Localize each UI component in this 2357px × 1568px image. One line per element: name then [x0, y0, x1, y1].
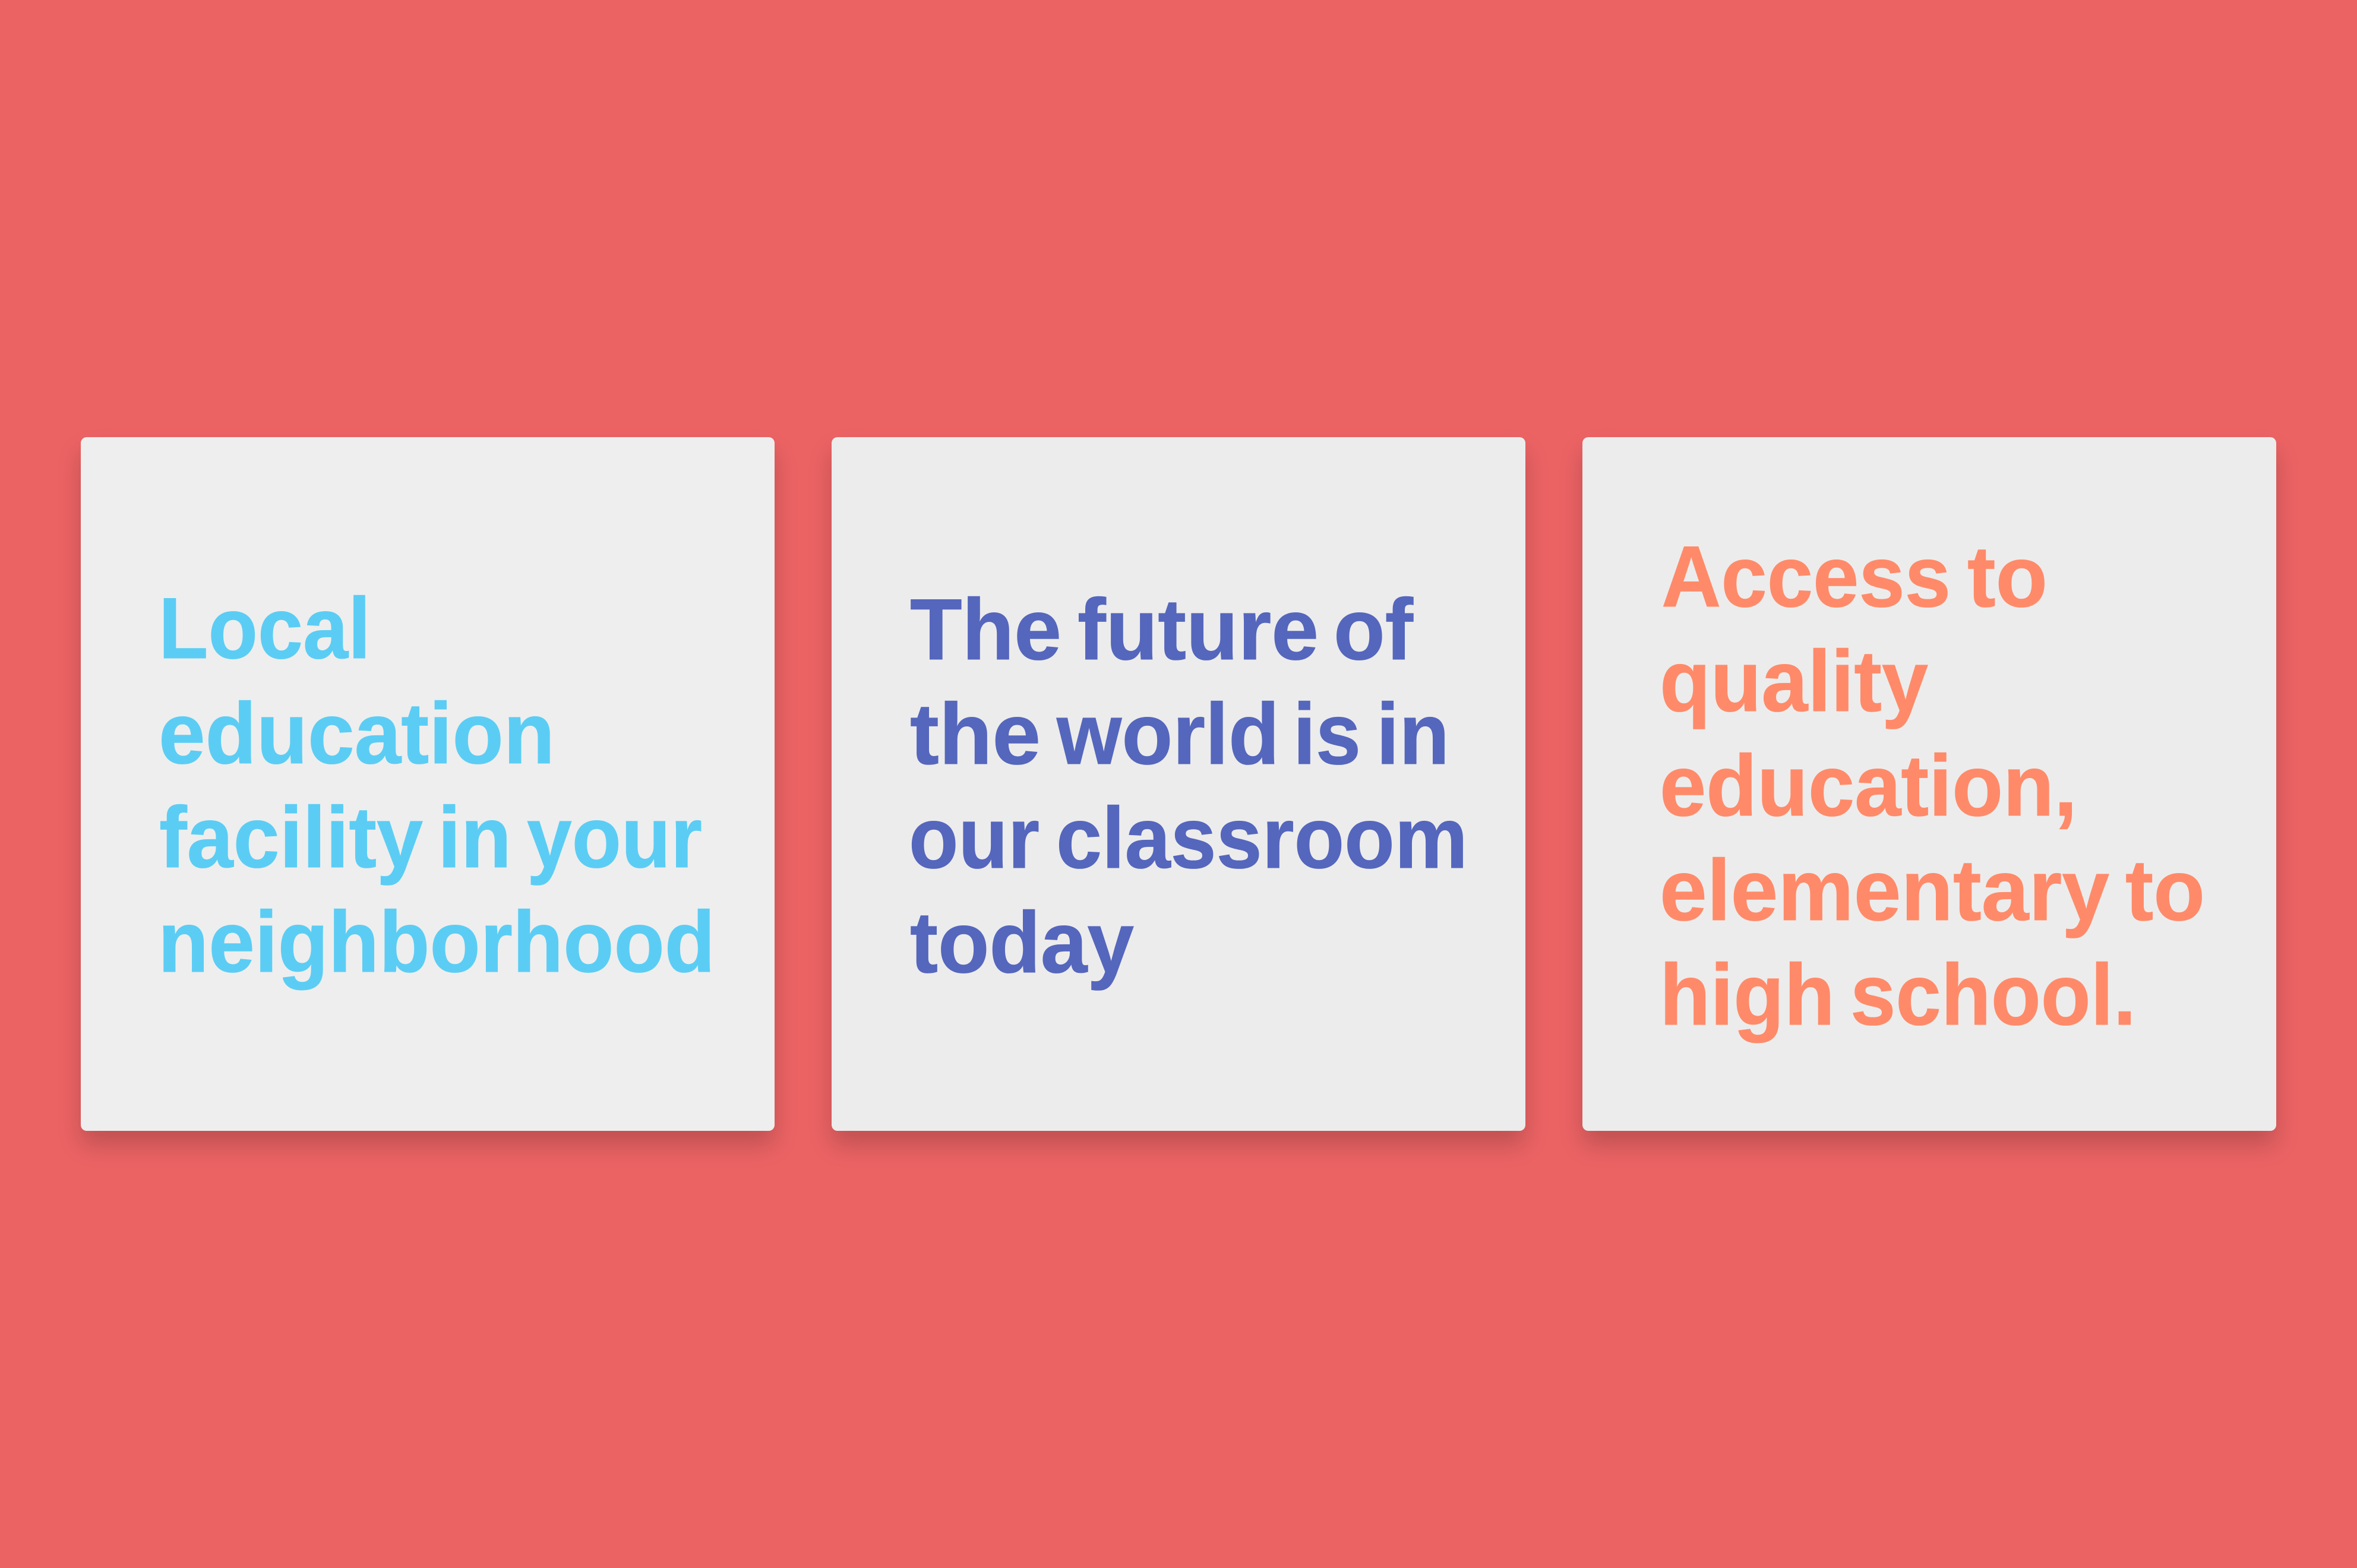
- text: future of the world message: world: [1056, 685, 1279, 782]
- text: access to quality education message: [1660, 528, 2205, 1043]
- text: future of the world message: today: [910, 894, 1134, 991]
- text: access to quality education message: to: [1967, 528, 2048, 625]
- text: access to quality education message: elementary: [1660, 842, 2109, 938]
- text: local education message: facility: [159, 789, 423, 886]
- panel: future of the world card: [832, 437, 1525, 1131]
- text: future of the world message: [909, 581, 1468, 991]
- text: access to quality education message: to: [2125, 842, 2205, 938]
- text: access to quality education message: school.: [1850, 946, 2136, 1043]
- panel: local education card: [81, 437, 775, 1131]
- text: local education message: in: [438, 789, 511, 886]
- text: future of the world message: the: [910, 685, 1041, 782]
- text: future of the world message: The: [910, 581, 1061, 678]
- text: future of the world message: of: [1334, 581, 1413, 678]
- text: local education message: neighborhood: [158, 893, 715, 990]
- text: future of the world message: is: [1293, 685, 1361, 782]
- text: access to quality education message: education,: [1660, 737, 2077, 834]
- text: access to quality education message: Access: [1661, 528, 1951, 625]
- text: local education message: Local: [159, 580, 371, 676]
- text: local education message: your: [527, 789, 702, 886]
- text: local education message: education: [159, 685, 555, 782]
- text: future of the world message: in: [1376, 685, 1449, 782]
- text: future of the world message: our: [909, 789, 1040, 886]
- text: future of the world message: classroom: [1056, 789, 1468, 886]
- panel: access to education card: [1582, 437, 2276, 1131]
- text: access to quality education message: quality: [1660, 633, 1928, 729]
- text: future of the world message: future: [1078, 581, 1319, 678]
- text: access to quality education message: high: [1660, 946, 1835, 1043]
- text: local education message: [158, 580, 715, 990]
